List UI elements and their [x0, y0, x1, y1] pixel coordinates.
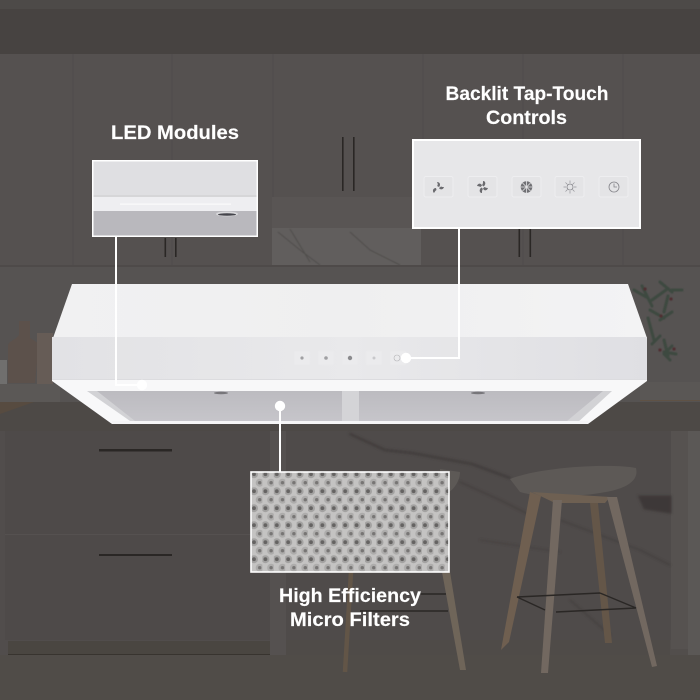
stool right	[501, 466, 657, 673]
floor	[0, 655, 700, 700]
leader line and dot	[401, 228, 459, 363]
button: light	[555, 176, 584, 197]
icon: cutting boards on counter	[0, 321, 53, 384]
heading: Backlit Tap-Touch Controls: Controls	[486, 107, 567, 129]
hood underside rim	[52, 380, 647, 424]
hood touch buttons	[294, 351, 406, 365]
controls inset	[413, 140, 640, 228]
leader line and dot	[116, 237, 147, 390]
button: fan high	[512, 176, 541, 197]
LED inset photo	[92, 160, 258, 237]
marble island	[286, 431, 700, 655]
filter panel right	[359, 391, 603, 421]
stool left	[345, 469, 466, 672]
heading: Backlit Tap-Touch Controls	[446, 83, 608, 129]
heading: High Efficiency Micro Filters	[279, 585, 421, 631]
icon: plant	[634, 282, 682, 360]
callout: Backlit Tap-Touch Controls	[401, 83, 640, 363]
callout: High Efficiency Micro Filters	[251, 401, 449, 631]
hood top surface	[53, 284, 647, 338]
filter mesh inset	[251, 472, 449, 572]
button: timer	[599, 176, 628, 197]
center divider	[342, 391, 359, 423]
button: fan medium	[468, 176, 497, 197]
filter panel left	[97, 391, 342, 421]
heading: Backlit Tap-Touch Controls: Backlit Tap-Touch	[446, 83, 608, 105]
cabinet handles	[164, 137, 531, 257]
hood front face	[52, 337, 647, 380]
hood lights	[214, 392, 485, 394]
heading: LED Modules: LED Modules	[111, 122, 239, 144]
button: fan low	[424, 176, 453, 197]
range hood	[52, 284, 647, 424]
lower cabinet with drawers	[0, 431, 286, 656]
callout: LED Modules	[92, 122, 258, 390]
silver frame	[87, 391, 612, 423]
heading: High Efficiency Micro Filters: High Efficiency	[279, 585, 421, 607]
heading: High Efficiency Micro Filters: Micro Filters	[290, 609, 410, 631]
leader line and dot	[275, 401, 285, 472]
